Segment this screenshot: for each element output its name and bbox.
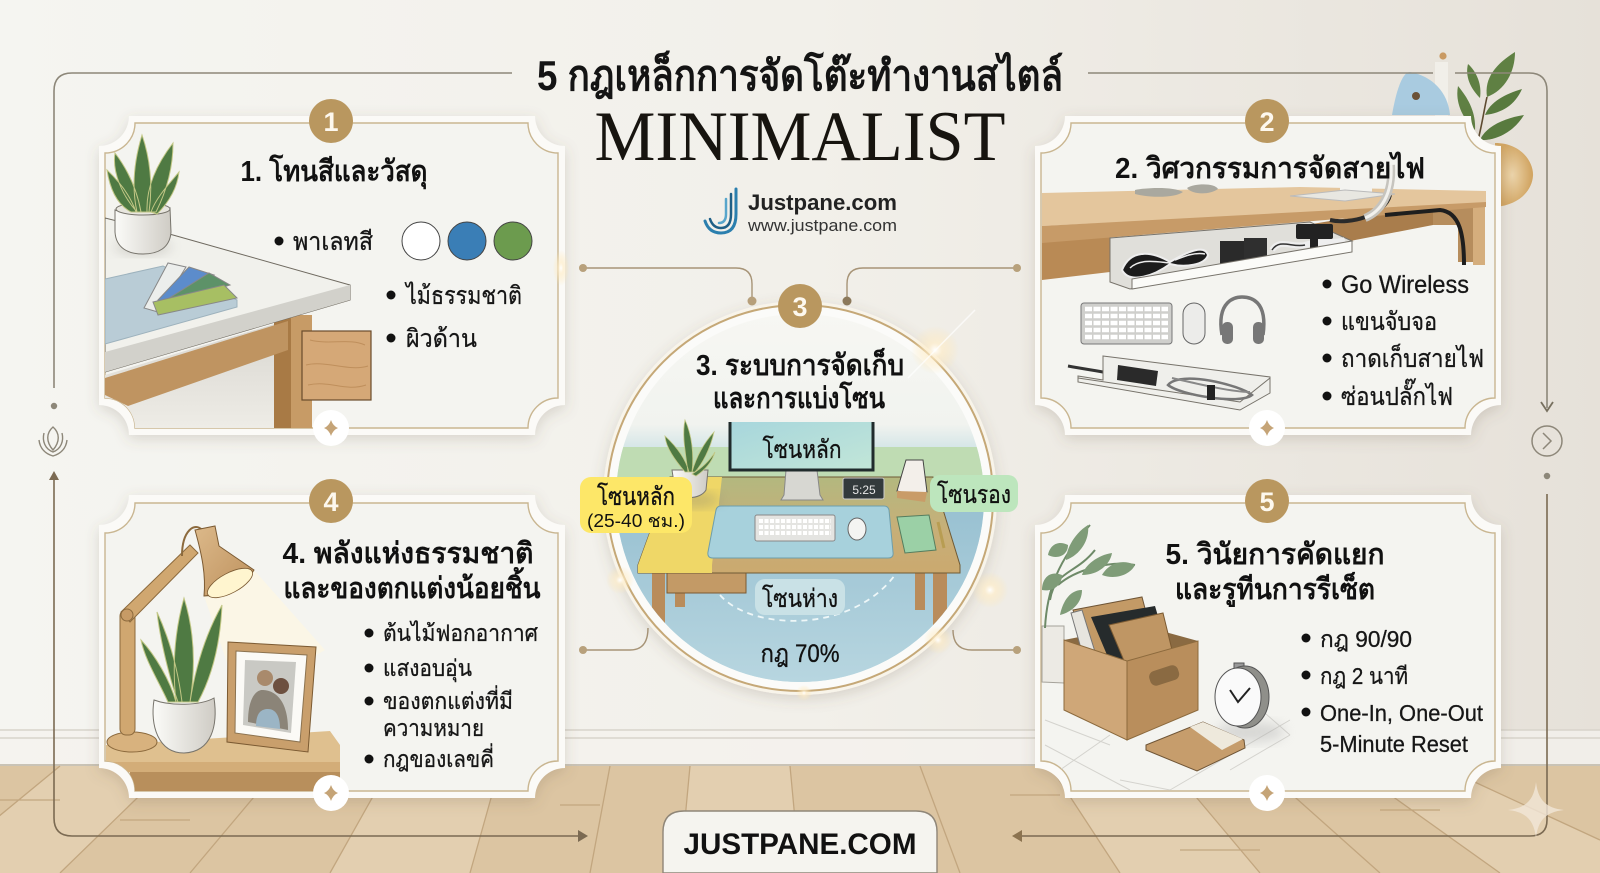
list: card 1 material items: ไม้ธรรมชาติ — [404, 281, 522, 310]
illustration: box, books, clock and plant — [1042, 525, 1290, 790]
illustration: desk zoning scene — [617, 418, 984, 682]
illustration: desk zoning scene: 5:25 — [852, 483, 876, 497]
list: card 4 items: ความหมาย — [383, 715, 484, 741]
footer tab: JUSTPANE.COM — [663, 811, 937, 873]
logo: Justpane — [705, 189, 897, 235]
badge: number 3 — [778, 284, 822, 328]
list: card 5 items: กฎ 90/90 — [1320, 626, 1412, 652]
label: green secondary zone: โซนรอง — [937, 480, 1011, 509]
frame: top-right line with arrow — [1088, 73, 1553, 411]
label: primary zone on monitor: โซนหลัก — [762, 435, 842, 464]
heading: card 4 — [282, 538, 541, 605]
icon: sparkle — [1508, 782, 1564, 838]
heading: card 3 — [696, 347, 904, 415]
frame: left arrow up and bottom arrow — [49, 471, 588, 842]
heading: card 4: และของตกแต่งน้อยชิ้น — [284, 566, 541, 605]
panel: card 5 decluttering routine — [1035, 479, 1501, 811]
heading: card 3: 3. ระบบการจัดเก็บ — [696, 347, 904, 382]
panel: card 1 colours and materials — [99, 99, 565, 446]
list: card 5 items: กฎ 2 นาที — [1320, 663, 1408, 689]
decor: top right vase, ball and leaves — [1392, 52, 1533, 207]
illustration: lamp, plant and photo frame on a shelf — [106, 526, 340, 792]
list: card 4 items — [364, 620, 538, 772]
list: card 5 items: 5-Minute Reset — [1320, 731, 1469, 757]
icon: circle chevron — [1532, 426, 1562, 478]
list: card 4 items: แสงอบอุ่น — [383, 655, 472, 682]
badge: diamond 5 — [1249, 775, 1285, 811]
list: card 1 material items — [386, 281, 522, 353]
palette: white blue green swatches — [402, 222, 532, 260]
heading: card 2: 2. วิศวกรรมการจัดสายไฟ — [1115, 151, 1425, 185]
logo: Justpane: www.justpane.com — [747, 217, 897, 235]
label: 70 percent rule: กฎ 70% — [760, 640, 840, 668]
badge: number 3: 3 — [792, 292, 808, 322]
decor: light flares — [553, 250, 1008, 701]
badge: diamond 1 — [313, 410, 349, 446]
list: card 2 items: ถาดเก็บสายไฟ — [1341, 343, 1484, 373]
heading: card 5 — [1166, 539, 1384, 607]
panel: card 2 cable engineering — [1035, 99, 1501, 446]
label: distant zone: โซนห่าง — [762, 584, 838, 613]
icon: lotus — [39, 404, 67, 456]
list: card 5 items: One-In, One-Out — [1320, 700, 1484, 726]
list: card 4 items: ของตกแต่งที่มี — [383, 685, 513, 714]
illustration: desk corner with plant and swatches — [105, 135, 371, 428]
list: card 2 items: ซ่อนปลั๊กไฟ — [1341, 378, 1453, 411]
list: card 2 items: แขนจับจอ — [1341, 308, 1437, 336]
label: distant zone — [755, 579, 845, 615]
connector: centre to card 2 — [842, 264, 1021, 306]
connector: centre to card 5 — [953, 630, 1021, 654]
title: Thai heading: 5 กฎเหล็กการจัดโต๊ะทำงานสไตล์ — [537, 50, 1063, 99]
title: MINIMALIST: MINIMALIST — [594, 98, 1006, 176]
logo: Justpane: Justpane.com — [748, 190, 897, 215]
background: wooden floor — [0, 766, 1600, 873]
frame: right line and bottom arrow — [1012, 494, 1547, 842]
list: card 1 material items: ผิวด้าน — [406, 325, 477, 353]
list: card 1 palette item: พาเลทสี — [293, 228, 373, 256]
label: yellow primary zone — [580, 477, 692, 533]
badge: number 4 — [309, 479, 353, 523]
frame: top-left line — [54, 73, 512, 388]
panel: card 4 nature and decor — [99, 479, 565, 811]
badge: number 2: 2 — [1259, 107, 1275, 137]
list: card 5 items — [1302, 626, 1484, 757]
badge: diamond 2 — [1249, 410, 1285, 446]
connector: centre to card 4 — [579, 628, 648, 654]
connector: centre to card 1 — [579, 264, 756, 306]
heading: card 5: และรูทีนการรีเซ็ต — [1175, 571, 1375, 607]
label: green secondary zone — [930, 475, 1018, 512]
badge: number 5 — [1245, 479, 1289, 523]
heading: card 4: 4. พลังแห่งธรรมชาติ — [282, 538, 534, 570]
list: card 2 items: Go Wireless — [1341, 271, 1469, 299]
panel: centre circle storage and zoning — [553, 250, 1018, 707]
badge: number 1 — [309, 99, 353, 143]
badge: number 2 — [1245, 99, 1289, 143]
badge: number 5: 5 — [1259, 487, 1275, 517]
badge: number 1: 1 — [323, 107, 339, 137]
heading: card 3: และการแบ่งโซน — [713, 380, 885, 415]
label: yellow primary zone: โซนหลัก — [597, 482, 675, 511]
list: card 4 items: ต้นไม้ฟอกอากาศ — [383, 620, 538, 646]
background: skirting board — [0, 730, 1600, 766]
badge: diamond 4 — [313, 775, 349, 811]
footer tab: JUSTPANE.COM: JUSTPANE.COM — [684, 828, 916, 861]
illustration: under-desk cable tray — [1042, 165, 1486, 410]
badge: number 4: 4 — [323, 487, 339, 517]
label: yellow primary zone: (25-40 ชม.) — [587, 511, 685, 531]
heading: card 1: 1. โทนสีและวัสดุ — [240, 153, 428, 189]
list: card 4 items: กฎของเลขคี่ — [383, 743, 494, 772]
list: card 2 items — [1322, 271, 1484, 411]
heading: card 5: 5. วินัยการคัดแยก — [1166, 539, 1384, 571]
